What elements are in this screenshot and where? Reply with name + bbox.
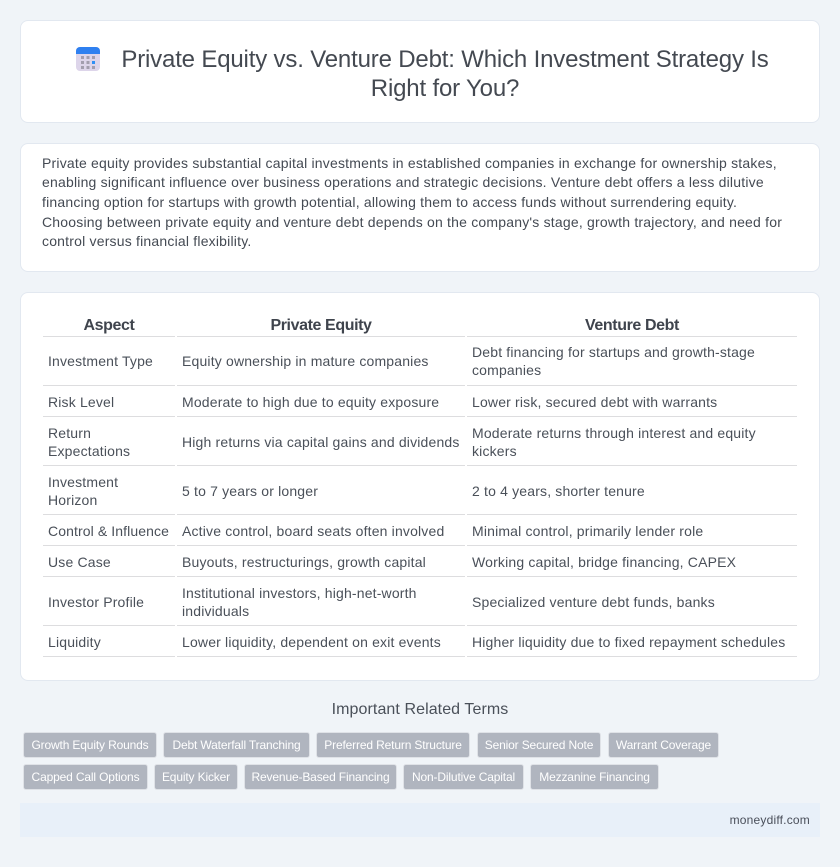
row: control and influence: Control & Influence xyxy=(48,523,169,539)
row: investment type: Equity ownership in mature companies xyxy=(182,353,429,369)
row: risk level xyxy=(48,394,717,410)
row: use case: Use Case xyxy=(48,554,111,570)
related terms tags: Non-Dilutive Capital xyxy=(412,770,515,784)
related terms tags: Capped Call Options xyxy=(32,770,139,784)
related terms tags: Growth Equity Rounds xyxy=(31,738,149,752)
row: investment horizon: 2 to 4 years, shorter tenure xyxy=(472,483,645,499)
related terms tags: Debt Waterfall Tranching xyxy=(172,738,300,752)
footer bar xyxy=(20,803,820,837)
intro paragraph xyxy=(42,155,782,249)
row: control and influence: Active control, board seats often involved xyxy=(182,523,444,539)
icon: calendar xyxy=(76,47,100,71)
row: return expectations: High returns via capital gains and dividends xyxy=(182,434,460,450)
row: investment type: Debt financing for startups and growth-stage xyxy=(472,344,755,360)
row: liquidity: Lower liquidity, dependent on exit events xyxy=(182,634,441,650)
row: investment type xyxy=(48,344,755,378)
related terms tags: Revenue-Based Financing xyxy=(252,770,389,784)
row: return expectations: Moderate returns through interest and equity xyxy=(472,425,756,441)
related terms tags xyxy=(23,732,719,790)
row: liquidity xyxy=(48,634,785,650)
title xyxy=(121,46,769,102)
row: investor profile: individuals xyxy=(182,603,249,619)
intro paragraph: Choosing between private equity and venture debt depends on the company's stage, growth trajectory, and need for xyxy=(42,214,782,230)
row: control and influence xyxy=(48,523,703,539)
row: use case: Working capital, bridge financing, CAPEX xyxy=(472,554,736,570)
intro paragraph: enabling significant influence over business operations and strategic decisions. Venture debt offers a less dilutive xyxy=(42,174,764,190)
title: Right for You? xyxy=(371,75,519,102)
row: risk level: Risk Level xyxy=(48,394,114,410)
row: investment type: Investment Type xyxy=(48,353,153,369)
comparison table panel xyxy=(20,292,820,681)
row: liquidity: Higher liquidity due to fixed repayment schedules xyxy=(472,634,785,650)
intro text panel xyxy=(20,143,820,272)
row: investor profile: Specialized venture debt funds, banks xyxy=(472,594,715,610)
row: return expectations xyxy=(48,425,756,459)
row: use case xyxy=(48,554,736,570)
row: control and influence: Minimal control, primarily lender role xyxy=(472,523,703,539)
table header: Private Equity xyxy=(270,317,372,334)
table header: Venture Debt xyxy=(585,317,679,334)
title: Private Equity vs. Venture Debt: Which Investment Strategy Is xyxy=(121,46,769,73)
intro paragraph: control versus financial flexibility. xyxy=(42,233,251,249)
row: investment horizon: 5 to 7 years or longer xyxy=(182,483,318,499)
related terms tags: Warrant Coverage xyxy=(616,738,711,752)
row: risk level: Moderate to high due to equity exposure xyxy=(182,394,439,410)
row: investment horizon xyxy=(48,474,645,508)
row: risk level: Lower risk, secured debt with warrants xyxy=(472,394,717,410)
table header: Aspect xyxy=(84,317,134,334)
row: return expectations: Return xyxy=(48,425,91,441)
related terms tags: Mezzanine Financing xyxy=(539,770,650,784)
related terms tags: Preferred Return Structure xyxy=(324,738,462,752)
row: investor profile: Institutional investors, high-net-worth xyxy=(182,585,417,601)
related terms tags: Senior Secured Note xyxy=(485,738,593,752)
row: investor profile xyxy=(48,585,715,619)
row: investment horizon: Investment xyxy=(48,474,118,490)
row: liquidity: Liquidity xyxy=(48,634,101,650)
intro paragraph: financing option for startups with growth potential, allowing them to access funds without surrendering equity. xyxy=(42,194,737,210)
row: return expectations: kickers xyxy=(472,443,517,459)
footer site name: moneydiff.com xyxy=(730,813,810,827)
related terms tags: Equity Kicker xyxy=(162,770,230,784)
header panel xyxy=(20,20,820,123)
row: use case: Buyouts, restructurings, growth capital xyxy=(182,554,426,570)
row: investment type: companies xyxy=(472,362,541,378)
row: investor profile: Investor Profile xyxy=(48,594,144,610)
related terms heading: Important Related Terms xyxy=(332,701,508,718)
table header xyxy=(84,317,680,334)
table xyxy=(43,317,797,657)
row: return expectations: Expectations xyxy=(48,443,130,459)
row: investment horizon: Horizon xyxy=(48,492,97,508)
intro paragraph: Private equity provides substantial capital investments in established companies in exchange for ownership stakes, xyxy=(42,155,777,171)
